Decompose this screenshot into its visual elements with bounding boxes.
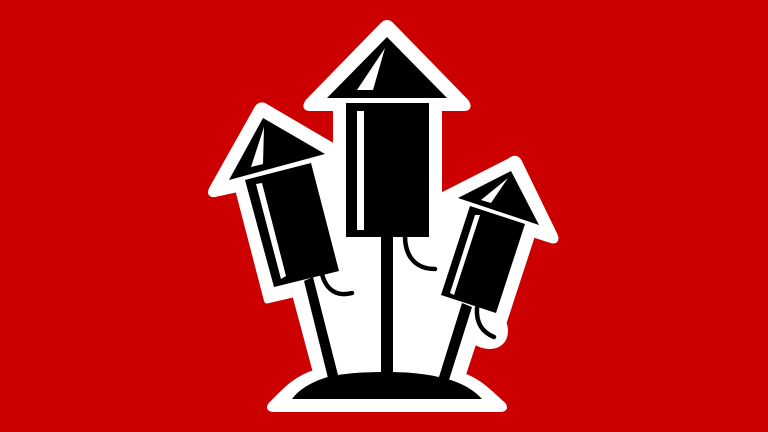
left rocket [229, 118, 352, 378]
right rocket cone highlight [481, 178, 508, 203]
left rocket body [245, 163, 339, 287]
right rocket stick [439, 303, 472, 380]
left rocket cone [229, 118, 325, 180]
center rocket body stripe [357, 111, 364, 230]
right rocket body [441, 206, 525, 313]
center rocket [327, 37, 447, 376]
right rocket body stripe [450, 215, 480, 295]
left rocket fuse [322, 274, 352, 294]
right rocket cone [458, 171, 539, 225]
right rocket [439, 171, 539, 380]
center rocket cone highlight [357, 48, 385, 90]
left rocket body stripe [256, 183, 286, 279]
left rocket stick [304, 277, 338, 378]
center rocket body [346, 103, 429, 237]
white sticker outline [211, 23, 556, 409]
mound base [292, 372, 482, 399]
right rocket fuse [477, 308, 494, 337]
center rocket cone [327, 37, 447, 98]
center rocket fuse [405, 236, 435, 269]
left rocket cone highlight [251, 127, 264, 167]
center rocket stick [381, 236, 393, 376]
